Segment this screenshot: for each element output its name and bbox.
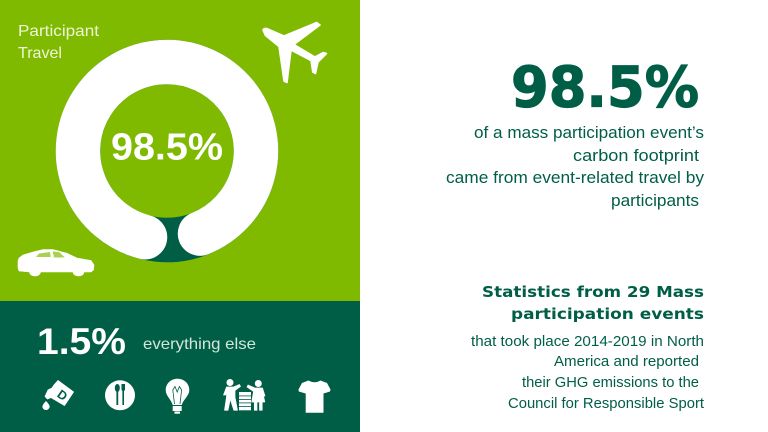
- panel: everything else: [0, 301, 360, 432]
- icon: plate and cutlery: [105, 380, 135, 410]
- text block: carbon footprint description: of a mass participation event’s: [474, 124, 704, 142]
- icon: bottle: [42, 380, 74, 410]
- icon: light bulb: [166, 379, 189, 414]
- heading: participant travel: [18, 23, 100, 62]
- headline stat: 98.5%: [511, 56, 699, 120]
- heading: statistics: participation events: [511, 305, 704, 323]
- text block: carbon footprint description: carbon footprint: [573, 147, 699, 165]
- text block: statistics description: [471, 334, 704, 412]
- stat: 1.5%: 1.5%: [37, 321, 126, 362]
- icon: people at recycling bin: [224, 379, 265, 410]
- panel: participant travel: [0, 0, 360, 301]
- heading: statistics: Statistics from 29 Mass: [482, 283, 704, 301]
- icon: t-shirt: [298, 380, 330, 413]
- text block: statistics description: their GHG emissions to the: [522, 375, 699, 391]
- icon: airplane: [263, 22, 326, 82]
- text block: statistics description: America and reported: [554, 354, 699, 370]
- text block: carbon footprint description: [446, 124, 705, 210]
- heading: statistics: [482, 283, 704, 323]
- heading: participant travel: Travel: [18, 45, 62, 62]
- heading: participant travel: Participant: [18, 23, 100, 40]
- text block: statistics description: Council for Responsible Sport: [508, 396, 704, 412]
- icon: bottle: D: [54, 387, 70, 404]
- text block: carbon footprint description: participants: [611, 192, 699, 210]
- label: everything else: everything else: [143, 336, 256, 353]
- donut chart: [78, 62, 256, 240]
- text block: carbon footprint description: came from event-related travel by: [446, 169, 705, 187]
- icon: car: [18, 250, 94, 276]
- text block: statistics description: that took place 2014-2019 in North: [471, 334, 704, 350]
- donut value: 98.5%: [111, 126, 223, 168]
